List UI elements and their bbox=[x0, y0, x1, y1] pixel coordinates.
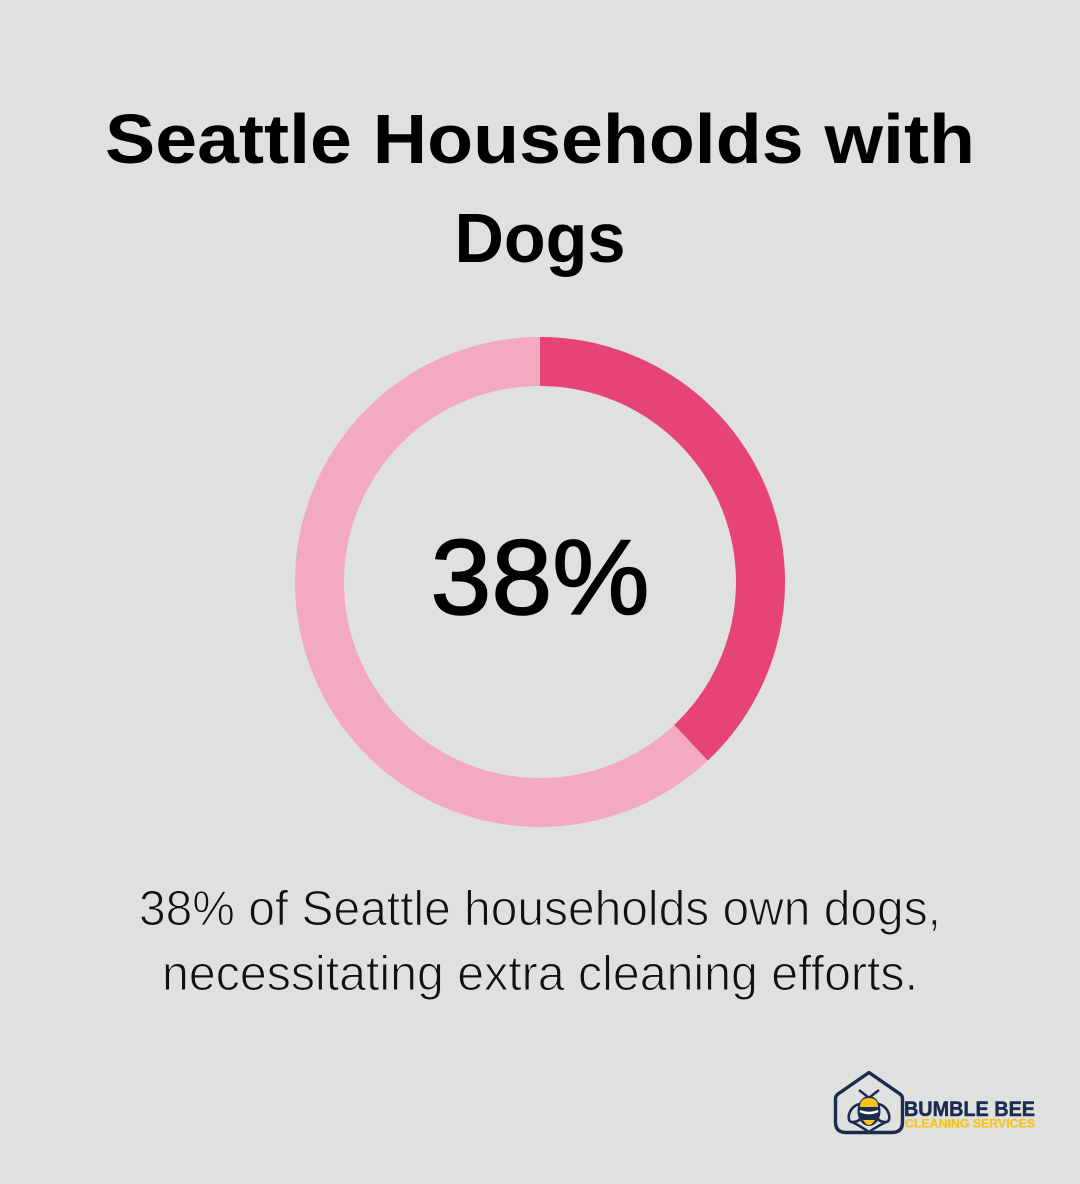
donut value: 38% bbox=[430, 517, 650, 637]
wordmark: BUMBLE BEE bbox=[904, 1098, 1035, 1121]
title: Seattle Households with bbox=[105, 100, 975, 178]
donut chart: 38% bbox=[320, 362, 761, 802]
title bbox=[105, 100, 975, 277]
title: Dogs bbox=[454, 199, 626, 277]
description: necessitating extra cleaning efforts. bbox=[162, 947, 918, 1001]
description bbox=[139, 882, 941, 1001]
tagline: CLEANING SERVICES bbox=[905, 1116, 1035, 1130]
description: 38% of Seattle households own dogs, bbox=[139, 882, 941, 936]
logo: Bumble Bee Cleaning Services bbox=[836, 1072, 1035, 1132]
icon: house with bee bbox=[836, 1072, 902, 1132]
